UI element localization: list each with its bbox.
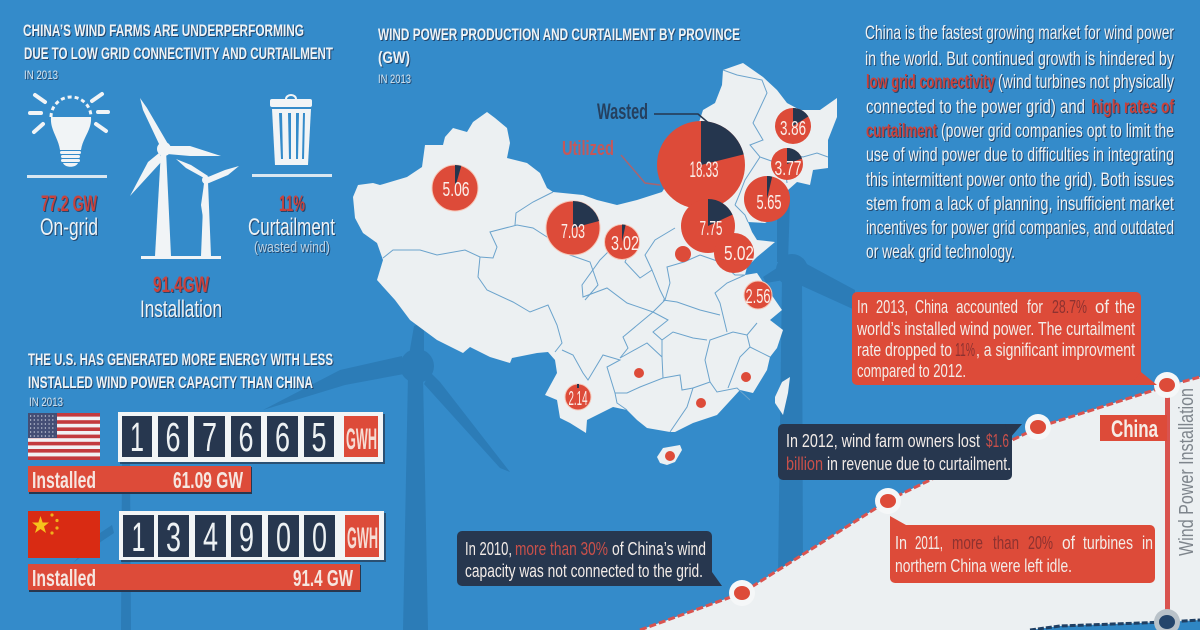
heading: production by province: WIND POWER PRODUCTION AND CURTAILMENT BY PROVINCE — [378, 25, 740, 44]
legend: wasted — [597, 99, 711, 125]
stat: curtailment: 11% — [279, 191, 305, 216]
pie 5.65 — [744, 176, 790, 222]
timeline area — [640, 372, 1200, 630]
counter: China generation: 0 — [312, 514, 327, 560]
mainland — [353, 63, 837, 433]
counter: US generation: 6 — [166, 414, 180, 460]
pie 5.65: 5.65 — [756, 192, 782, 214]
counter: US generation — [118, 412, 385, 464]
pie 2.14: 2.14 — [568, 388, 588, 410]
bar: US installed — [28, 466, 252, 494]
stat: on-grid: On-grid — [40, 214, 98, 241]
counter: China generation — [119, 511, 386, 562]
stat: installation: Installation — [140, 296, 222, 323]
pie 2.56 — [744, 281, 772, 309]
callout: 2011: turbines — [1083, 533, 1133, 553]
counter: US generation: 5 — [312, 414, 326, 460]
icon: light bulb — [30, 94, 108, 167]
callout: 2011: in — [1142, 533, 1153, 553]
counter: US generation: GWH — [346, 423, 377, 456]
pie 3.86: 3.86 — [780, 118, 806, 140]
bar: US installed: Installed — [32, 467, 96, 493]
callout: 2013: 2013, — [876, 297, 908, 317]
pie 7.03: 7.03 — [561, 221, 585, 243]
counter: China generation: 3 — [166, 514, 181, 560]
pie 7.03 — [546, 201, 600, 255]
callout: 2011: 2011, — [915, 533, 943, 553]
bar: China installed: 91.4 GW — [293, 565, 353, 591]
heading: production by province — [378, 25, 740, 86]
pie 2.56: 2.56 — [746, 286, 770, 308]
heading: production by province: IN 2013 — [378, 72, 411, 86]
stat: curtailment — [248, 191, 335, 256]
callout: 2010: capacity was not connected to the grid. — [465, 561, 703, 581]
Hainan — [657, 445, 682, 465]
pie 3.02: 3.02 — [611, 233, 639, 255]
callout: 2013: China — [915, 297, 949, 317]
pie 3.77: 3.77 — [774, 158, 802, 180]
icon: wind turbines — [130, 98, 239, 259]
callout: 2013: , a significant improvment — [976, 340, 1135, 360]
stat: on-grid: 77.2 GW — [41, 191, 97, 216]
growth area — [640, 377, 1200, 630]
callout: 2011: 20% — [1028, 533, 1053, 553]
icon: China flag — [28, 511, 100, 558]
background turbines — [73, 200, 855, 630]
callout: 2010: more than 30% — [515, 539, 608, 559]
stat: curtailment: (wasted wind) — [254, 239, 330, 256]
icon: US flag — [28, 413, 100, 460]
bar: China installed: Installed — [32, 565, 96, 591]
counter: US generation: 6 — [238, 414, 254, 460]
Taiwan — [775, 377, 790, 415]
callout: 2011: northern China were left idle. — [895, 556, 1072, 576]
pie 7.75 — [681, 199, 735, 253]
point 2013 — [1154, 372, 1180, 398]
heading: wind farms underperforming: DUE TO LOW GRID CONNECTIVITY AND CURTAILMENT — [24, 44, 333, 63]
callout: 2010: In 2010, — [465, 539, 512, 559]
counter: US generation: 7 — [202, 414, 217, 460]
callout: 2013: 28.7% — [1052, 297, 1087, 317]
pie 5.06: 5.06 — [442, 179, 470, 201]
pie 3.02 — [604, 224, 640, 260]
callout: 2012: In 2012, wind farm owners lost — [786, 431, 980, 451]
heading: wind farms underperforming — [23, 21, 333, 82]
callout: 2013: accounted — [956, 297, 1018, 317]
point 2012 — [1025, 414, 1051, 440]
legend: utilized — [562, 138, 660, 185]
US baseline area — [1030, 620, 1200, 630]
pie 5.02 — [714, 233, 754, 273]
pie 3.86 — [775, 108, 811, 144]
pie 5.02: 5.02 — [724, 243, 754, 265]
counter: China generation: 4 — [203, 514, 218, 560]
callout: 2012: $1.6 — [986, 431, 1009, 451]
axis label: Wind Power Installation — [1176, 388, 1198, 556]
callout: 2012: in revenue due to curtailment. — [827, 454, 1011, 474]
intro text block: connected to the power grid) and — [866, 97, 1085, 118]
callout: 2012 — [778, 424, 1022, 480]
pie charts — [432, 108, 811, 461]
point 2010 — [729, 580, 755, 606]
stat: installation — [140, 272, 222, 323]
callout: 2013: rate dropped to — [857, 340, 952, 360]
pie 5.06 — [432, 165, 478, 211]
counter: China generation: 9 — [239, 514, 254, 560]
callout: 2011: In — [895, 533, 907, 553]
callout: 2011: more — [952, 533, 983, 553]
callout: 2010: of China’s wind — [612, 539, 706, 559]
counter: China generation: GWH — [347, 522, 378, 555]
heading: US vs China: THE U.S. HAS GENERATED MORE ENERGY WITH LESS — [28, 350, 333, 369]
divider: on-grid — [27, 175, 107, 178]
counter: US generation: 1 — [130, 414, 144, 460]
pie 18.33: 18.33 — [690, 157, 718, 182]
callout: 2013: compared to 2012. — [857, 361, 966, 381]
counter: US generation: 6 — [275, 414, 290, 460]
vertical axis — [1165, 390, 1170, 615]
stat: on-grid — [40, 191, 98, 241]
callout: 2011 — [890, 516, 1155, 583]
counter: China generation: 0 — [276, 514, 291, 560]
icon: trash can — [270, 95, 312, 165]
callout: 2010 — [457, 531, 722, 586]
intro text block — [865, 23, 1175, 263]
legend: utilized: Utilized — [562, 138, 614, 160]
point 2011 — [875, 488, 901, 514]
pie 18.33 — [657, 121, 745, 209]
small province dots — [634, 246, 751, 461]
stat: installation: 91.4GW — [153, 272, 209, 297]
counter: China generation: 1 — [132, 514, 146, 560]
callout: 2013: the — [1115, 297, 1135, 317]
callout: 2011: of — [1062, 533, 1076, 553]
heading: production by province: (GW) — [378, 48, 410, 67]
bar: China installed — [28, 564, 361, 592]
US baseline dashes — [1030, 620, 1200, 630]
intro text block: or weak grid technology. — [866, 242, 1015, 263]
map of China — [353, 63, 837, 465]
intro text block: low grid connectivity — [866, 72, 995, 93]
callout: 2013: 11% — [955, 340, 975, 360]
China tag — [1100, 415, 1167, 443]
stat: curtailment: Curtailment — [248, 214, 335, 241]
bar: US installed: 61.09 GW — [173, 467, 243, 493]
heading: US vs China: INSTALLED WIND POWER CAPACITY THAN CHINA — [28, 373, 313, 392]
pie 7.75: 7.75 — [700, 218, 722, 240]
pie 2.14 — [565, 384, 591, 410]
callout: 2011: than — [993, 533, 1019, 553]
growth dashed line — [640, 377, 1200, 630]
callout: 2012: billion — [786, 454, 823, 474]
callout: 2013 — [852, 292, 1157, 385]
callout: 2013: of — [1095, 297, 1110, 317]
intro text block: curtailment — [866, 121, 937, 142]
China tag: China — [1111, 416, 1158, 443]
legend: wasted: Wasted — [597, 99, 648, 124]
point US — [1154, 609, 1180, 630]
heading: US vs China: IN 2013 — [29, 395, 63, 409]
divider: curtailment — [252, 174, 332, 177]
province borders — [383, 70, 828, 432]
heading: wind farms underperforming: IN 2013 — [24, 68, 58, 82]
callout: 2013: In — [857, 297, 868, 317]
heading: wind farms underperforming: CHINA’S WIND FARMS ARE UNDERPERFORMING — [23, 21, 304, 40]
callout: 2013: for — [1027, 297, 1043, 317]
pie 3.77 — [771, 148, 803, 180]
heading: US vs China — [28, 350, 333, 409]
